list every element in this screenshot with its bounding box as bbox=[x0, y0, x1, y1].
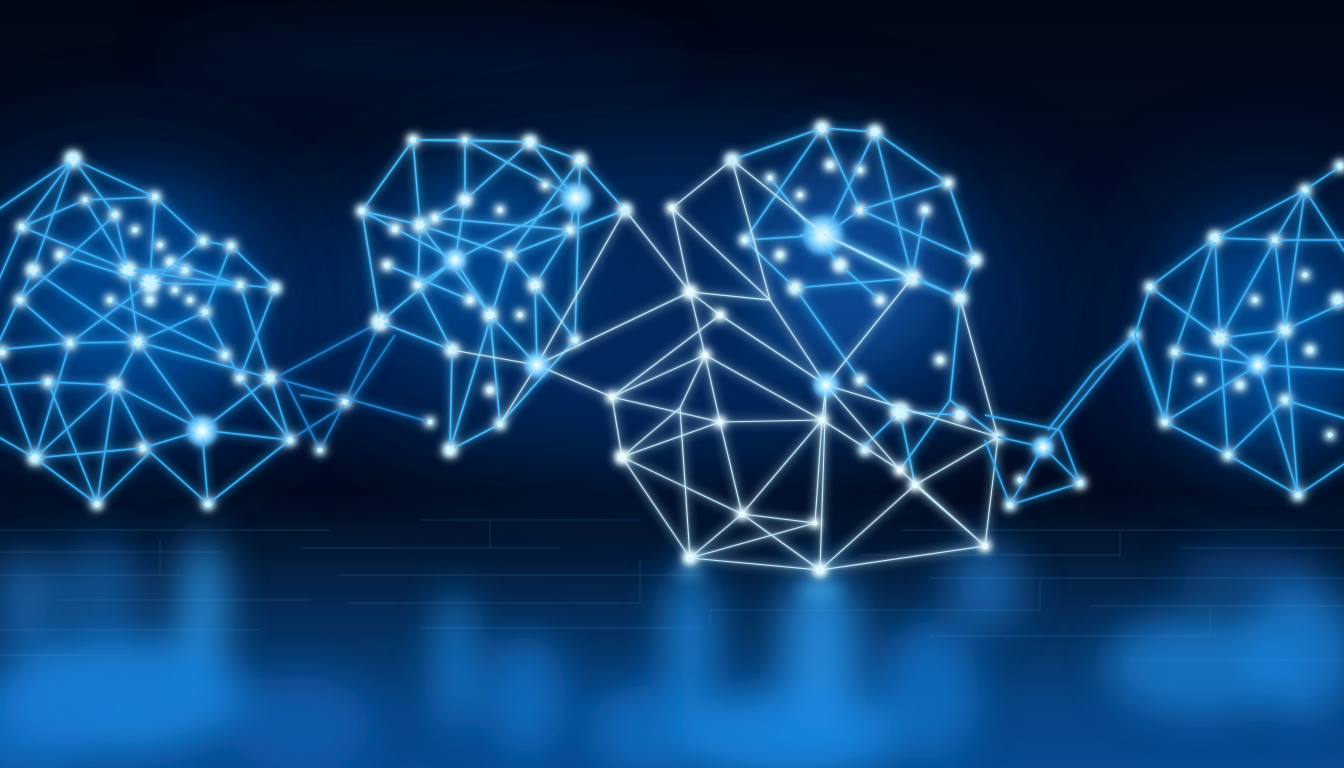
bright core bbox=[1246, 353, 1270, 377]
network cluster: foreground white wireframe bbox=[452, 160, 1001, 574]
mesh lines bbox=[0, 159, 290, 504]
mesh lines bbox=[985, 335, 1165, 505]
mesh lines bbox=[1135, 160, 1344, 495]
bright core bbox=[801, 213, 845, 257]
mesh lines bbox=[732, 128, 998, 485]
reflective floor bbox=[0, 520, 1344, 768]
floor circuitry bbox=[0, 520, 1344, 660]
network cluster: far left bbox=[0, 154, 432, 507]
bright core bbox=[1031, 435, 1055, 459]
floor hot spots beneath the mesh bbox=[676, 565, 840, 600]
cluster haze behind the meshes bbox=[30, 150, 1344, 450]
nodes bbox=[359, 137, 629, 454]
nodes bbox=[1147, 163, 1343, 498]
bright core bbox=[559, 181, 593, 215]
mesh lines bbox=[362, 140, 625, 450]
nodes bbox=[609, 205, 1001, 574]
bright core bbox=[185, 414, 219, 448]
nodes bbox=[0, 154, 432, 507]
connecting strands to centre bbox=[275, 322, 430, 450]
mesh lines bbox=[452, 160, 998, 570]
nodes bbox=[1007, 332, 1138, 508]
network cluster: right of centre, rear bbox=[728, 124, 998, 485]
bright junctions bbox=[523, 351, 551, 379]
nodes bbox=[728, 124, 979, 453]
connecting mesh: lower right link bbox=[985, 332, 1165, 508]
network cluster: centre left bbox=[359, 137, 629, 454]
floor reflections bbox=[0, 535, 1344, 768]
network cluster: far right bbox=[1135, 160, 1344, 498]
